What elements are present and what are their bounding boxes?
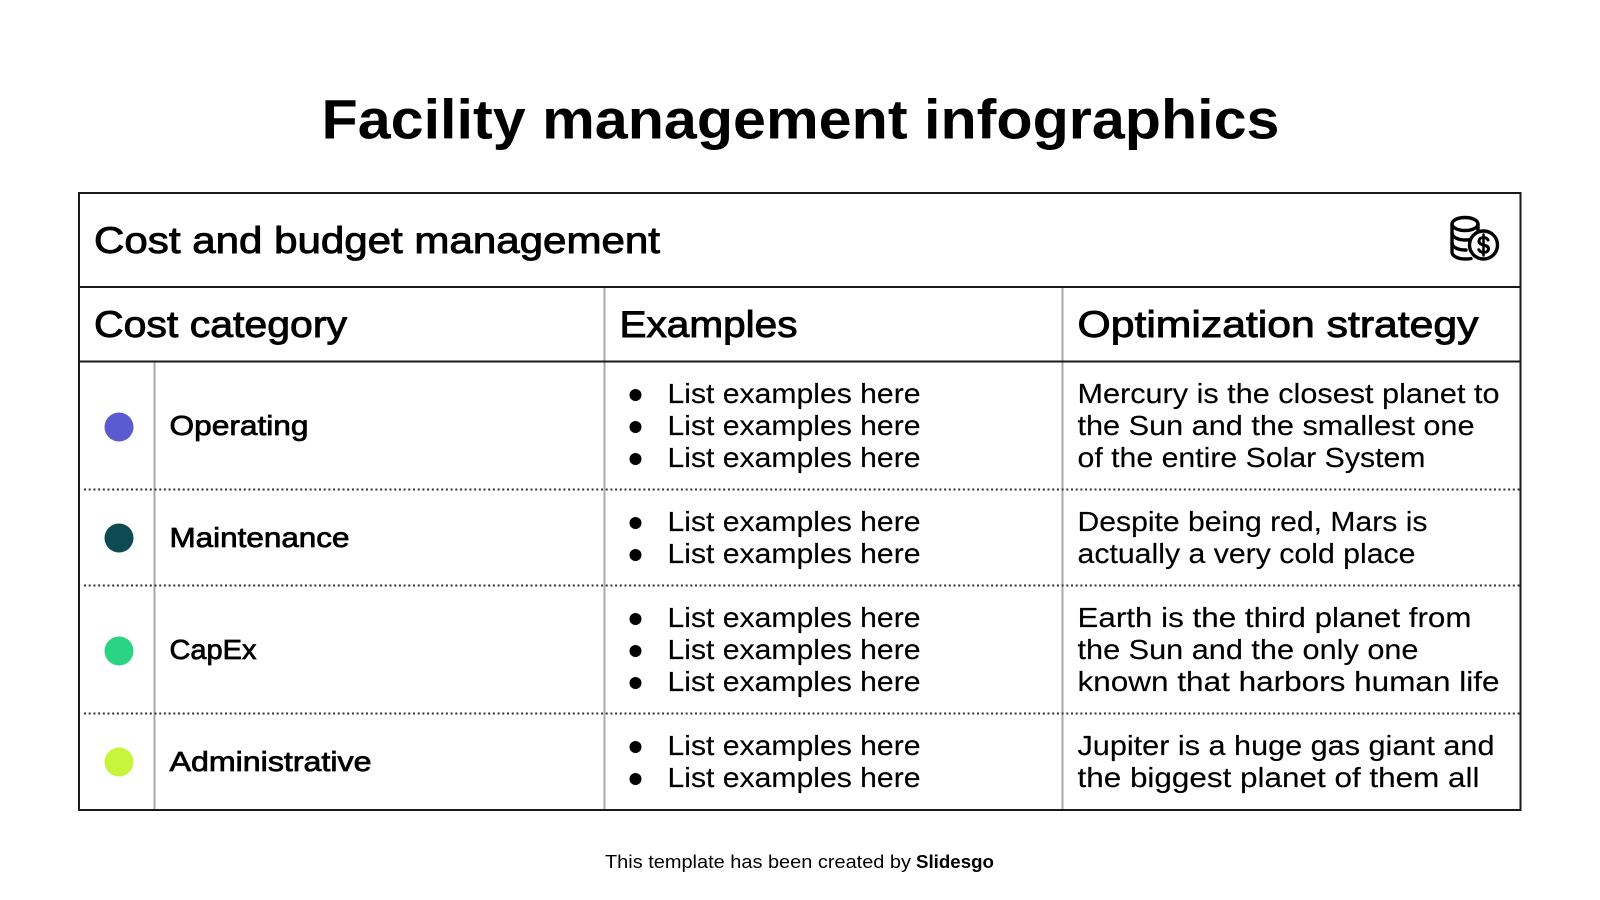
title: Facility management infographics [322, 88, 1280, 150]
examples list [630, 602, 920, 697]
row: maintenance [104, 506, 1428, 569]
examples list: List examples here [668, 538, 920, 569]
row: capex [104, 602, 1500, 697]
strategy text [1078, 730, 1494, 793]
strategy text: the biggest planet of them all [1078, 762, 1480, 793]
examples list [630, 506, 920, 569]
footer credit: Slidesgo [916, 851, 994, 872]
strategy text: Mercury is the closest planet to [1078, 378, 1500, 409]
row: operating [104, 378, 1500, 473]
strategy text [1078, 506, 1428, 569]
strategy text [1078, 378, 1500, 473]
examples list [630, 378, 920, 473]
examples list: List examples here [668, 634, 920, 665]
table title: Cost and budget management [94, 220, 661, 261]
icon: lime dot [104, 748, 134, 776]
strategy text: Earth is the third planet from [1078, 602, 1472, 633]
examples list: List examples here [668, 442, 920, 473]
examples list: List examples here [668, 730, 920, 761]
icon: dark teal dot [104, 524, 134, 552]
icon: purple dot [104, 412, 134, 442]
icon: coins with dollar [1452, 218, 1498, 259]
category label: Administrative [170, 746, 372, 777]
examples list: List examples here [668, 378, 920, 409]
category label: Maintenance [170, 522, 350, 553]
column headers [94, 304, 1479, 345]
strategy text: Jupiter is a huge gas giant and [1078, 730, 1494, 761]
panel: cost and budget table [79, 193, 1520, 810]
header: cost category: Cost category [94, 304, 348, 345]
table grid lines [79, 193, 1520, 810]
strategy text: known that harbors human life [1078, 666, 1500, 697]
strategy text: the Sun and the smallest one [1078, 410, 1474, 441]
strategy text [1078, 602, 1500, 697]
header: optimization strategy: Optimization strategy [1078, 304, 1479, 345]
examples list [630, 730, 920, 793]
icon: green dot [104, 636, 134, 666]
examples list: List examples here [668, 410, 920, 441]
strategy text: actually a very cold place [1078, 538, 1416, 569]
footer credit: This template has been created by [605, 851, 912, 872]
category label: CapEx [170, 634, 256, 665]
strategy text: the Sun and the only one [1078, 634, 1418, 665]
row: administrative [104, 730, 1494, 793]
strategy text: Despite being red, Mars is [1078, 506, 1428, 537]
examples list: List examples here [668, 506, 920, 537]
examples list: List examples here [668, 762, 920, 793]
category label: Operating [170, 410, 308, 441]
examples list: List examples here [668, 666, 920, 697]
strategy text: of the entire Solar System [1078, 442, 1426, 473]
header: examples: Examples [620, 304, 798, 345]
examples list: List examples here [668, 602, 920, 633]
